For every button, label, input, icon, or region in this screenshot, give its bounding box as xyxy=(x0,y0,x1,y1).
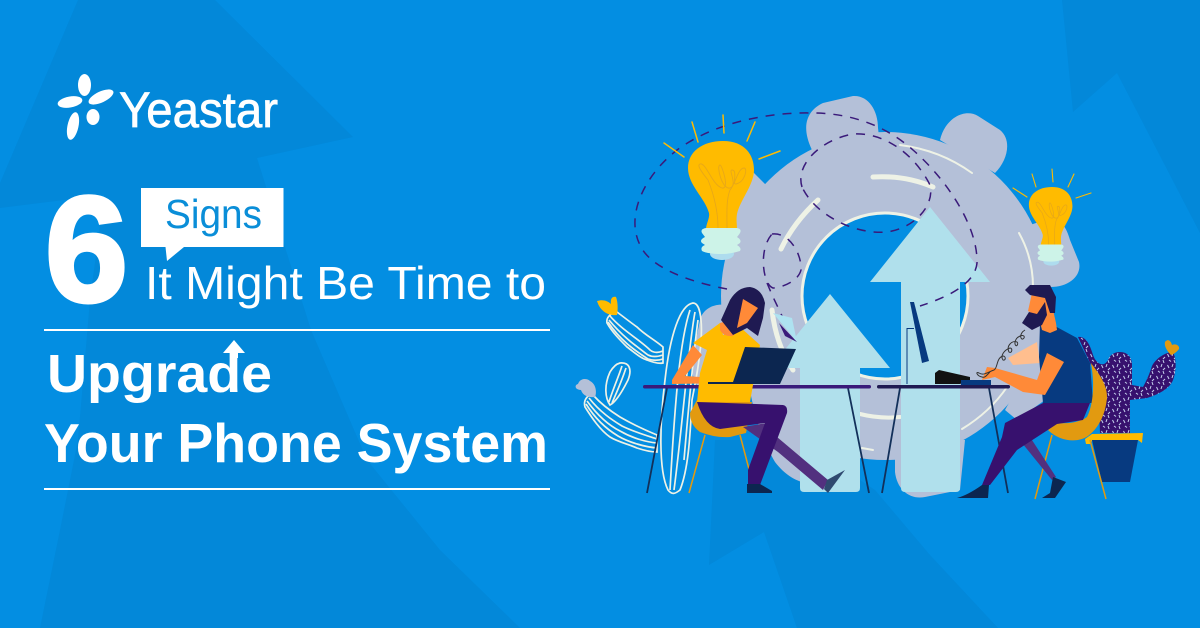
arm xyxy=(672,345,730,384)
shirt xyxy=(1039,323,1093,403)
heading: Your Phone System: Your Phone System xyxy=(44,412,548,474)
back arm xyxy=(1008,342,1040,365)
cactus flower: yellow xyxy=(597,297,618,315)
laptop xyxy=(708,347,796,384)
illustration xyxy=(576,96,1179,499)
paper plane xyxy=(773,313,797,342)
chair xyxy=(689,400,752,493)
woman with laptop xyxy=(672,287,845,493)
monitor xyxy=(907,302,929,384)
shoes xyxy=(957,485,989,498)
bulb rays xyxy=(664,115,780,159)
phone cord xyxy=(977,330,1025,377)
logo: Yeastar xyxy=(57,74,278,141)
subtitle line: It Might Be Time to xyxy=(145,257,546,309)
cactus flower: grey xyxy=(576,379,596,397)
cactus: outlined left xyxy=(585,303,701,493)
back leg xyxy=(743,423,828,490)
man on the phone xyxy=(957,285,1107,499)
desk phone xyxy=(935,370,991,385)
back leg xyxy=(1018,437,1056,480)
head xyxy=(1028,293,1057,333)
logo wordmark: Yeastar xyxy=(119,82,278,138)
arrow: small xyxy=(770,294,890,492)
heading: Upgrade: Upgrade xyxy=(47,344,272,404)
big number 6: 6 xyxy=(45,165,128,333)
icon: logo petals xyxy=(57,74,116,141)
seat xyxy=(1048,363,1107,440)
bulb base xyxy=(701,228,741,260)
shoes xyxy=(747,484,772,493)
shirt xyxy=(693,323,760,402)
light bulb: large xyxy=(664,115,780,260)
dashed flight paths xyxy=(635,113,977,318)
front arm xyxy=(982,353,1064,395)
gear xyxy=(692,96,1079,498)
bulb filament xyxy=(699,164,746,228)
cactus: purple with pot xyxy=(1078,337,1179,482)
front leg xyxy=(982,403,1090,485)
speech bubble: Signs: Signs xyxy=(165,191,262,237)
desk xyxy=(643,385,1010,493)
hair xyxy=(1025,285,1056,313)
beard xyxy=(1022,302,1047,330)
chair xyxy=(1035,435,1106,499)
front leg xyxy=(697,402,787,485)
light bulb: small xyxy=(1013,169,1091,266)
arrow: large xyxy=(870,207,990,492)
bulb glass xyxy=(688,141,754,229)
neck and head xyxy=(720,320,737,336)
speech bubble: Signs xyxy=(141,188,284,261)
title block xyxy=(44,165,550,490)
